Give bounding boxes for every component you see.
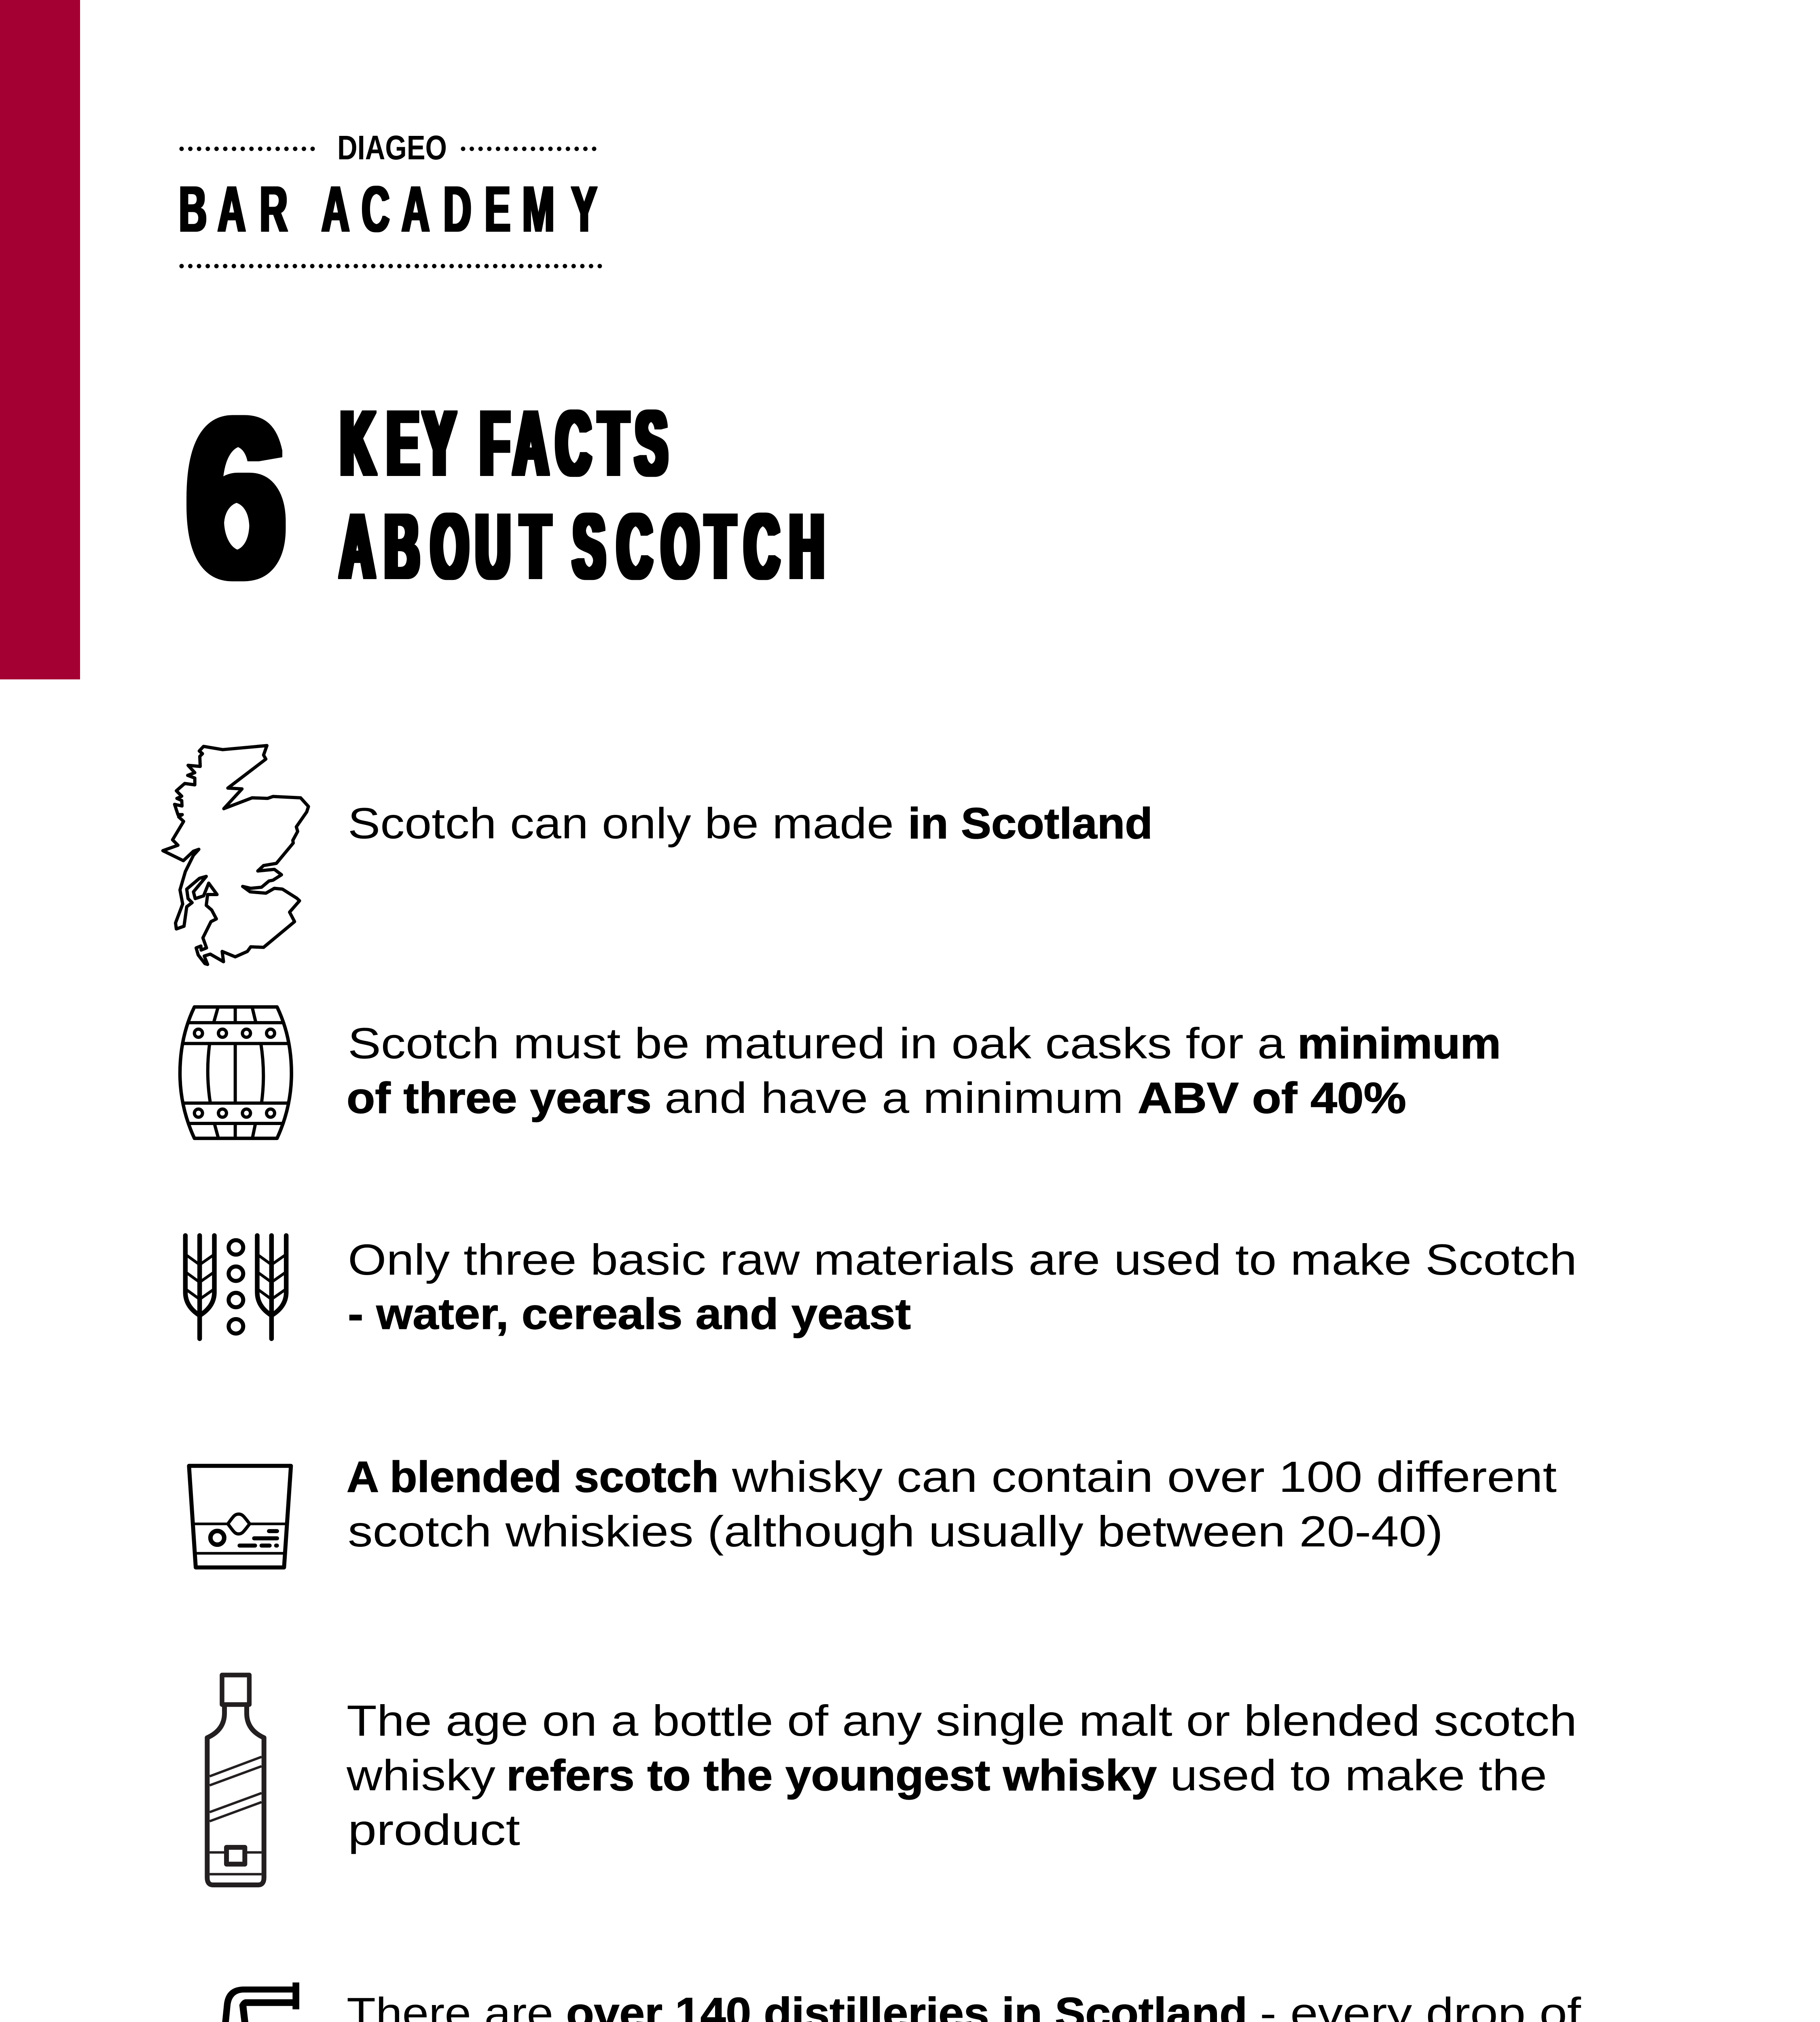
fact 4 text: whisky can contain over 100 different [732,1452,1557,1501]
title: 6 Key Facts About Scotch: ABOUT SCOTCH [340,495,824,598]
title: 6 Key Facts About Scotch [186,372,824,624]
title: 6 Key Facts About Scotch: 6 [186,372,287,624]
logo: Diageo Bar Academy: DIAGEO [337,129,447,167]
icon: barrel [180,1007,292,1138]
fact 4 text: scotch whiskies (although usually between 20-40) [348,1507,1443,1556]
fact 2 text: ABV of 40% [1138,1073,1406,1122]
fact 2 text: minimum [1297,1019,1501,1068]
fact 3: raw materials [185,1235,1577,1339]
fact 1 text [348,799,1153,848]
fact 5 text: product [348,1805,520,1854]
fact 5 text: whisky [346,1751,495,1800]
fact 1: made in Scotland [163,746,1153,964]
icon: whisky glass [189,1466,291,1567]
logo: Diageo Bar Academy [179,129,600,266]
fact 5 text: refers to the youngest whisky [506,1751,1157,1800]
fact 2 text [347,1019,1501,1122]
fact 4 text [347,1452,1557,1556]
icon: pot still [169,1982,303,2022]
fact 4 text: A blended scotch [347,1452,719,1501]
fact 5 text [346,1696,1577,1854]
red side bar [0,0,80,679]
fact 2 text: Scotch must be matured in oak casks for a [348,1019,1285,1068]
fact 5 text: The age on a bottle of any single malt or blended scotch [347,1696,1577,1745]
fact 5: age statement [207,1675,1577,1885]
fact 1 text: in Scotland [908,799,1153,848]
fact 2 text: of three years [347,1073,652,1122]
fact 5 text: used to make the [1170,1751,1547,1800]
title: 6 Key Facts About Scotch: KEY FACTS [341,392,667,495]
icon: whisky bottle [207,1675,264,1885]
fact 3 text: - water, cereals and yeast [348,1289,911,1338]
icon: wheat and grains [185,1235,286,1339]
icon: map of Scotland [163,746,309,964]
fact 2: oak casks [180,1007,1501,1138]
logo: Diageo Bar Academy: BAR ACADEMY [179,173,597,245]
fact 4: blended scotch [189,1452,1557,1567]
fact 1 text: Scotch can only be made [348,799,894,848]
fact 6 text [347,1988,1581,2022]
fact 6: distilleries [169,1982,1581,2022]
fact 3 text [348,1235,1577,1338]
fact 2 text: and have a minimum [665,1073,1124,1122]
fact 3 text: Only three basic raw materials are used to make Scotch [348,1235,1577,1284]
